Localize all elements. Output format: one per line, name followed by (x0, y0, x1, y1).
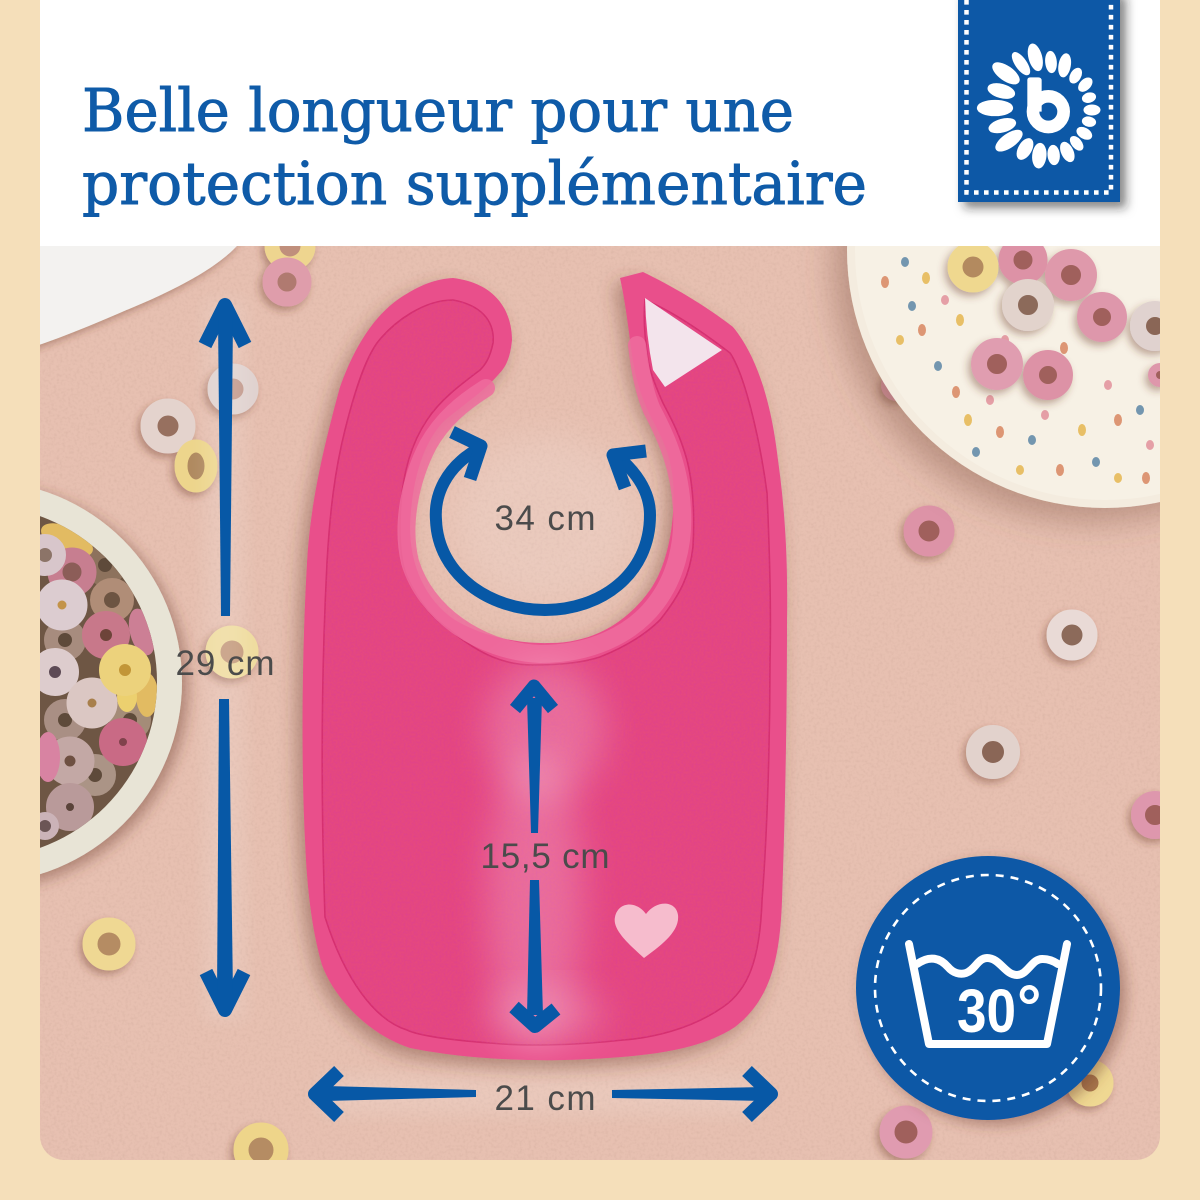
measurement label: width: 21 cm (494, 1079, 596, 1118)
icon: wash tub (909, 944, 1067, 1044)
wash badge: ° (1017, 973, 1041, 1041)
cereal bowl (40, 484, 196, 890)
dimension: chin length arrow (514, 686, 556, 1026)
loose cereal rings (90, 228, 1172, 1170)
glow behind side arrows (205, 300, 760, 1115)
panel: product photo (40, 246, 1160, 1160)
title: Belle longueur pour une (82, 76, 794, 145)
bib (303, 272, 787, 1060)
measurement label: neck: 34 cm (494, 499, 596, 538)
dimension: width arrow (315, 1071, 771, 1117)
cereal on plate (955, 243, 1172, 392)
white header band (40, 0, 1160, 246)
title: protection supplémentaire (82, 149, 867, 218)
dimension: total length arrow (205, 305, 245, 1010)
logo tag (958, 0, 1120, 202)
bib binding (303, 272, 787, 1060)
plate speckles (881, 276, 1150, 484)
dimension: neck arc arrow (436, 432, 650, 610)
velcro tab (645, 298, 722, 387)
towel (30, 240, 242, 348)
wash badge (856, 856, 1120, 1120)
measurement label: length: 29 cm (176, 644, 274, 683)
heart embroidery (615, 904, 678, 958)
measurement label: chin: 15,5 cm (480, 837, 610, 876)
bowl cereal (31, 516, 160, 836)
icon: sunflower b (978, 43, 1100, 168)
neck binding (406, 345, 682, 654)
speckled plate (818, 246, 1160, 536)
wash badge: 30 (957, 977, 1016, 1045)
terry interior (310, 290, 780, 1060)
soft glow behind vertical arrow (450, 435, 640, 1050)
